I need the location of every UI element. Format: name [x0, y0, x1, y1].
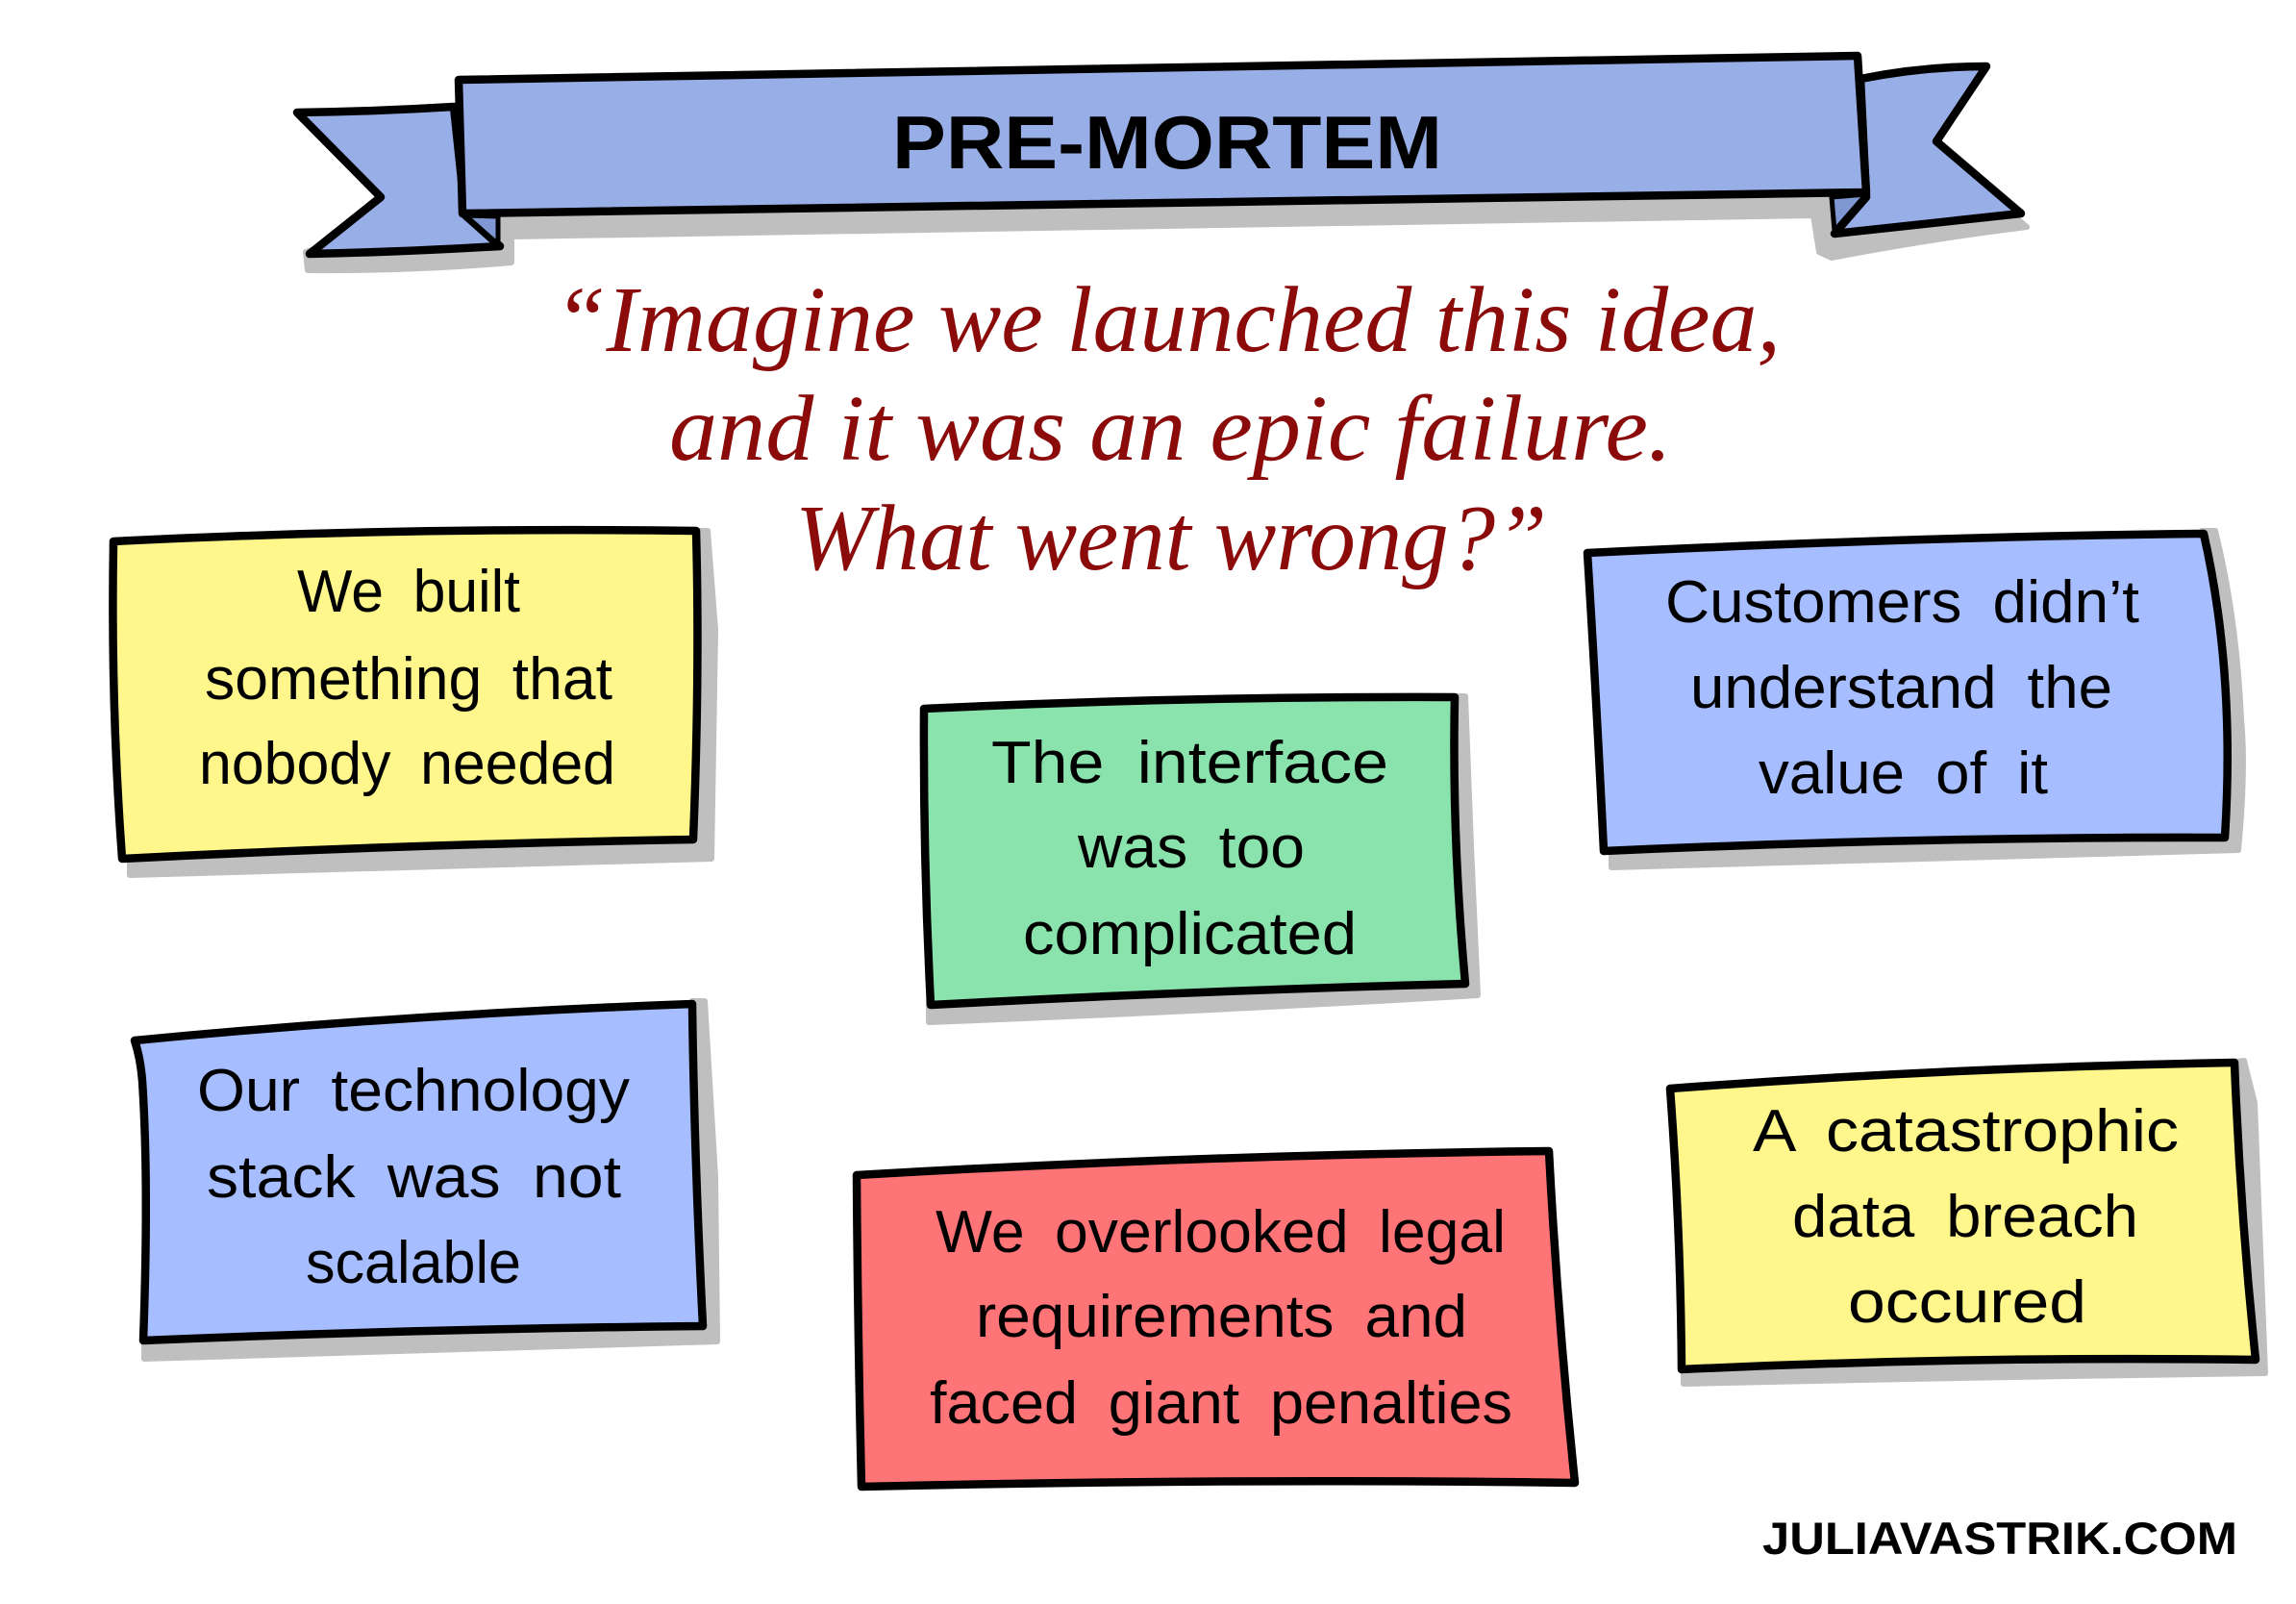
- text: breach: occured: [1848, 1269, 2086, 1336]
- text: we built: We built: [297, 559, 520, 625]
- text: legal: requirements and: [976, 1284, 1467, 1350]
- text: interface: The interface: [991, 730, 1388, 796]
- banner right tail: [1834, 66, 2021, 234]
- text: legal: We overlooked legal: [936, 1199, 1506, 1266]
- text: interface: [991, 730, 1388, 967]
- banner title: PRE-MORTEM: [892, 100, 1442, 185]
- text: customers: understand the: [1690, 655, 2112, 721]
- quote: What went wrong?”: [795, 487, 1547, 590]
- panel: catastrophic data breach: [1670, 1061, 2265, 1384]
- text: breach: data breach: [1792, 1184, 2138, 1250]
- quote: [554, 268, 1781, 590]
- banner main ribbon: [459, 56, 1866, 213]
- text: breach: A catastrophic: [1753, 1098, 2179, 1165]
- banner fold left: [465, 215, 498, 244]
- banner left tail: [297, 107, 500, 254]
- text: legal: faced giant penalties: [930, 1370, 1512, 1437]
- text: interface: was too: [1077, 815, 1305, 881]
- panel: customers did not understand: [1587, 531, 2243, 867]
- banner: [297, 56, 2027, 270]
- quote: “Imagine we launched this idea,: [554, 268, 1781, 372]
- text: legal: [930, 1199, 1512, 1437]
- text: customers: Customers didn’t: [1665, 569, 2139, 636]
- text: we built: something that: [205, 646, 612, 713]
- text: we built: [199, 559, 615, 797]
- text: technology: Our technology: [197, 1058, 630, 1124]
- text: technology: scalable: [306, 1230, 521, 1296]
- text: we built: nobody needed: [199, 731, 615, 797]
- text: breach: [1753, 1098, 2179, 1336]
- banner right fold: [1832, 194, 1866, 231]
- panel: we built something nobody needed: [112, 530, 715, 875]
- text: customers: [1665, 569, 2139, 807]
- panel: interface too complicated: [924, 696, 1478, 1022]
- text: customers: value of it: [1759, 740, 2048, 807]
- panel: overlooked legal requirements: [857, 1151, 1575, 1487]
- footer credit: JULIAVASTRIK.COM: [1762, 1513, 2237, 1564]
- text: technology: stack was not: [207, 1144, 621, 1211]
- text: technology: [197, 1058, 630, 1296]
- quote: and it was an epic failure.: [669, 377, 1672, 481]
- text: interface: complicated: [1023, 901, 1357, 967]
- panel: technology stack not scalable: [135, 1001, 717, 1359]
